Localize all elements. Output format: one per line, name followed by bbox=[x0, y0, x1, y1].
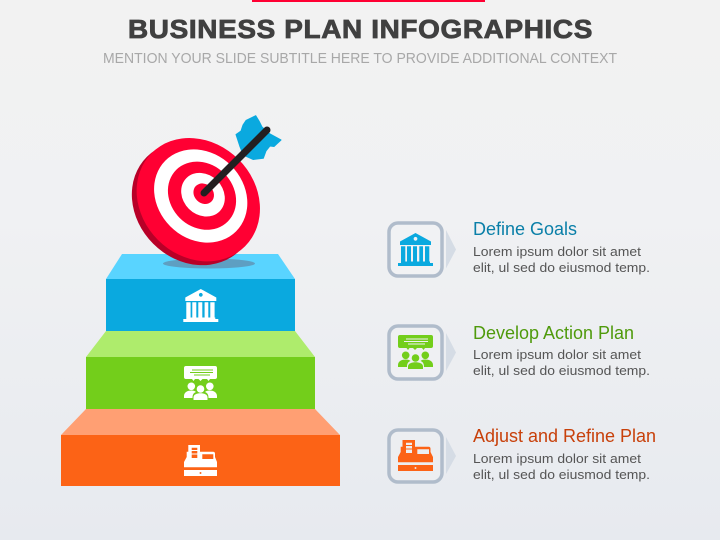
icon: bank blue bbox=[398, 233, 433, 266]
icon box bbox=[389, 430, 442, 482]
icon box bbox=[389, 326, 442, 379]
icon: bank white bbox=[183, 289, 218, 322]
arrow bbox=[446, 333, 456, 371]
arrow bbox=[446, 437, 456, 474]
step 2: green bbox=[86, 331, 315, 409]
heading: Adjust and Refine Plan bbox=[473, 426, 656, 446]
body text bbox=[473, 244, 650, 275]
item: define goals bbox=[389, 219, 650, 276]
body text: elit, ul sed do eiusmod temp. bbox=[473, 260, 650, 275]
staircase bbox=[61, 254, 340, 486]
subtitle: MENTION YOUR SLIDE SUBTITLE HERE TO PROVIDE ADDITIONAL CONTEXT bbox=[103, 51, 617, 67]
icon: team discussion green bbox=[398, 335, 433, 369]
body text bbox=[473, 451, 650, 482]
icon: cash register orange bbox=[398, 440, 433, 471]
heading: Develop Action Plan bbox=[473, 323, 634, 343]
body text: elit, ul sed do eiusmod temp. bbox=[473, 363, 650, 378]
accent bar bbox=[252, 0, 485, 2]
body text: Lorem ipsum dolor sit amet bbox=[473, 244, 641, 259]
body text bbox=[473, 347, 650, 378]
step 3: orange bbox=[61, 409, 340, 486]
icon box bbox=[389, 223, 442, 276]
body text: elit, ul sed do eiusmod temp. bbox=[473, 467, 650, 482]
arrow shaft bbox=[204, 130, 267, 193]
title: BUSINESS PLAN INFOGRAPHICS bbox=[128, 14, 593, 44]
body text: Lorem ipsum dolor sit amet bbox=[473, 451, 641, 466]
dartboard bbox=[107, 113, 285, 290]
step 1: blue bbox=[106, 254, 295, 331]
target on stand bbox=[107, 113, 285, 290]
arrow bbox=[446, 230, 456, 268]
icon: team discussion white bbox=[184, 366, 217, 400]
item: adjust and refine plan bbox=[389, 426, 656, 482]
arrow fletching bbox=[236, 116, 281, 160]
item: develop action plan bbox=[389, 323, 650, 379]
target shadow bbox=[163, 258, 255, 268]
heading: Define Goals bbox=[473, 219, 577, 239]
body text: Lorem ipsum dolor sit amet bbox=[473, 347, 641, 362]
icon: cash register white bbox=[184, 445, 217, 476]
